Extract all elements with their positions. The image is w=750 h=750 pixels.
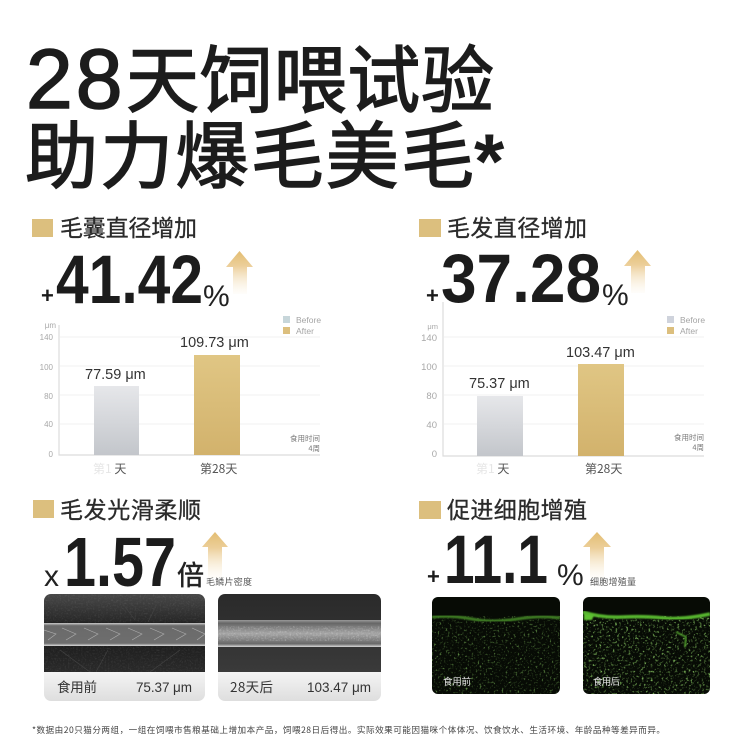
- caption: feeding time: 食用时间: [290, 433, 320, 444]
- caption: feeding time: [290, 433, 320, 454]
- x labels: [476, 460, 622, 477]
- stat: x1.57 times: 1.57: [64, 523, 176, 601]
- photo: before feeding hair: 食用前: [57, 676, 97, 696]
- title: *: [474, 117, 505, 205]
- stat: +11.1%: [427, 521, 636, 598]
- legend: [667, 315, 705, 336]
- bar chart: hair: μm: [427, 322, 438, 331]
- title: [25, 22, 505, 205]
- caption: feeding time: 食用时间: [674, 432, 704, 443]
- legend: Before: [296, 315, 321, 325]
- bar chart: follicle: 140: [40, 333, 54, 342]
- bar chart: follicle: μm: [45, 321, 56, 330]
- stat: +37.28%: +: [426, 283, 439, 308]
- stat: +11.1%: 11.1: [444, 521, 548, 598]
- value: 77.59: 77.59 μm: [85, 367, 146, 383]
- stat: +41.42%: %: [203, 280, 230, 313]
- bar: day 1: [94, 386, 139, 455]
- panel: hair smoothness: [33, 491, 381, 701]
- heading: hair smoothness: 毛发光滑柔顺: [60, 491, 201, 525]
- x labels: 第1 天: [93, 460, 126, 477]
- photo: before feeding skin: 食用前: [443, 674, 471, 688]
- photo: after 28 days hair: 103.47 μm: [307, 680, 371, 695]
- bar chart: follicle: 0: [49, 450, 54, 459]
- title: 天饲喂试验: [126, 22, 494, 128]
- x labels: 第1 天: [476, 460, 509, 477]
- x labels: [93, 460, 237, 477]
- heading icon: gold square: [32, 219, 53, 237]
- bar chart: follicle: [40, 315, 321, 477]
- heading icon: gold square: [419, 501, 441, 519]
- value: 109.73: 109.73 μm: [180, 335, 249, 351]
- photo: before feeding hair: [44, 594, 205, 701]
- heading icon: gold square: [33, 500, 54, 518]
- legend: After: [680, 326, 698, 336]
- stat: +37.28%: 37.28: [441, 240, 601, 317]
- icon: rising arrow: [202, 532, 228, 578]
- stat: +37.28%: %: [602, 279, 629, 312]
- bar: day 1: [477, 396, 523, 456]
- stat: x1.57 times: 倍: [177, 554, 204, 593]
- value: 75.37: 75.37 μm: [469, 376, 530, 392]
- stat: +11.1%: %: [557, 559, 584, 592]
- bar: day 28: [578, 364, 624, 456]
- icon: rising arrow: [226, 251, 253, 294]
- stat: x1.57 times: [44, 523, 252, 601]
- bar chart: hair: 80: [426, 391, 437, 402]
- bar chart: follicle: 100: [40, 363, 54, 372]
- stat: +11.1%: +: [427, 564, 440, 589]
- x labels: 第28天: [585, 460, 622, 477]
- stat: x1.57 times: 毛鳞片密度: [206, 575, 252, 588]
- legend: [283, 315, 321, 336]
- stat: x1.57 times: x: [44, 560, 59, 593]
- photo: before feeding skin: [432, 597, 560, 694]
- title: 28: [26, 32, 125, 126]
- heading icon: gold square: [419, 219, 441, 237]
- bar chart: hair: 0: [432, 449, 437, 460]
- caption: feeding time: [674, 432, 704, 453]
- legend: After: [296, 326, 314, 336]
- legend: Before: [680, 315, 705, 325]
- photo: after 28 days hair: [218, 594, 381, 701]
- photo: after feeding skin: 食用后: [593, 674, 620, 688]
- bar chart: hair: 40: [426, 420, 437, 431]
- heading: cell proliferation: 促进细胞增殖: [447, 491, 587, 525]
- panel: follicle diameter: [32, 209, 321, 477]
- photo: after 28 days hair: 28天后: [230, 676, 273, 696]
- bar chart: hair: 100: [421, 362, 437, 373]
- x labels: 第28天: [200, 460, 237, 477]
- bar: day 28: [194, 355, 240, 455]
- panel: hair diameter: [419, 209, 705, 477]
- title: 助力爆毛美毛: [25, 98, 474, 204]
- heading: hair diameter: 毛发直径增加: [447, 209, 587, 243]
- caption: feeding time: 4周: [692, 442, 704, 453]
- photo: before feeding hair: 75.37 μm: [136, 680, 192, 695]
- footnote: *数据由20只猫分两组，一组在饲喂市售粮基础上增加本产品，饲喂28日后得出。实际效果可能因猫咪个体体况、饮食饮水、生活环境、年龄品种等差异而异。: [32, 724, 665, 736]
- photo: after feeding skin: [583, 597, 710, 694]
- bar chart: hair: 140: [421, 333, 437, 344]
- stat: +41.42%: 41.42: [56, 241, 203, 318]
- bar chart: follicle: 80: [44, 392, 54, 401]
- stat: +11.1%: 细胞增殖量: [590, 575, 636, 588]
- bar chart: follicle: 40: [44, 420, 54, 429]
- bar chart: hair: [421, 302, 705, 477]
- icon: rising arrow: [624, 250, 651, 293]
- stat: +41.42%: +: [41, 283, 54, 308]
- heading: follicle diameter: 毛囊直径增加: [60, 209, 197, 243]
- caption: feeding time: 4周: [308, 443, 320, 454]
- value: 103.47: 103.47 μm: [566, 345, 635, 361]
- panel: cell proliferation: [419, 491, 710, 694]
- icon: rising arrow: [583, 532, 611, 578]
